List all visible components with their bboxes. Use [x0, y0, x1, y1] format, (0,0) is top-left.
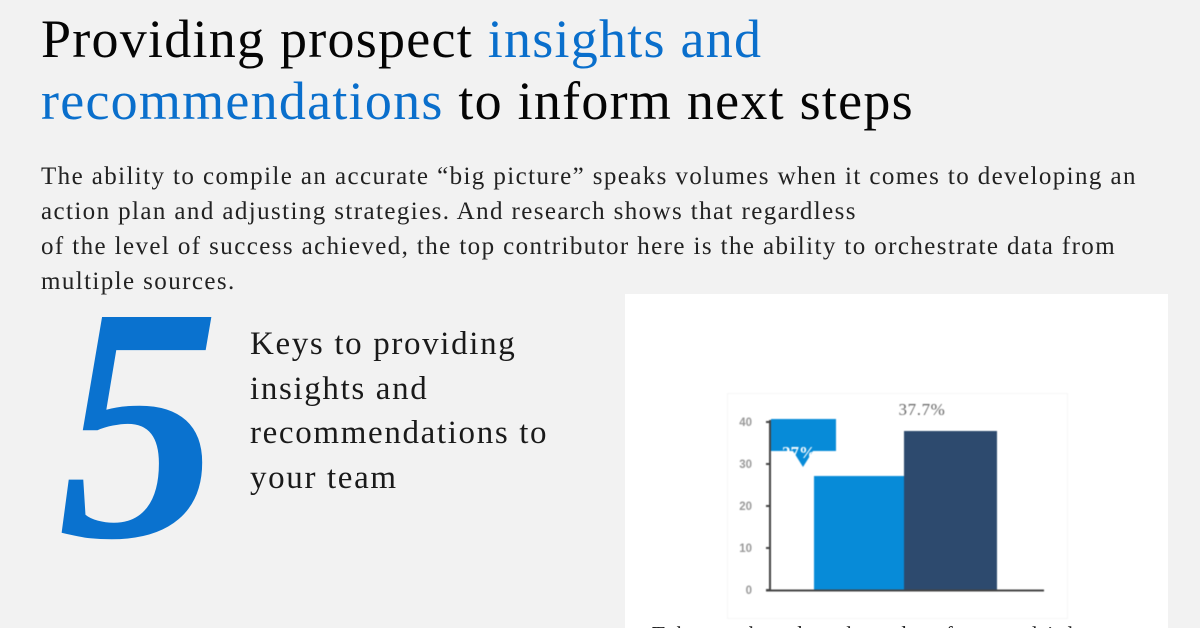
bar chart: 27%: [782, 443, 816, 462]
intro text block: of the level of success achieved, the top contributor here is the ability to orchestrate data from: [41, 233, 1116, 260]
title: recommendations to inform next steps: [41, 71, 914, 131]
title: Providing prospect insights and: [41, 9, 762, 69]
subheading: keys: recommendations to: [250, 415, 548, 451]
title: [41, 9, 914, 131]
intro text block: multiple sources.: [41, 268, 236, 295]
subheading: keys: Keys to providing: [250, 326, 516, 362]
intro text block: action plan and adjusting strategies. And research shows that regardless: [41, 198, 857, 225]
subheading: keys: your team: [250, 460, 398, 496]
bar chart: 40: [739, 417, 752, 429]
bar chart: [738, 400, 1045, 597]
subheading: keys: insights and: [250, 370, 428, 406]
intro text block: The ability to compile an accurate “big picture” speaks volumes when it comes to developing an: [41, 163, 1137, 190]
big number five: 5: [58, 238, 220, 608]
bar chart: 0: [746, 585, 752, 597]
intro text block: [41, 163, 1137, 295]
bar chart: 30: [739, 459, 752, 471]
panel: white chart card: [625, 294, 1168, 628]
subheading: keys: [250, 326, 548, 496]
bar chart: 20: [739, 501, 752, 513]
bar chart: 37.7%: [899, 400, 945, 419]
bar chart: 10: [739, 543, 752, 555]
